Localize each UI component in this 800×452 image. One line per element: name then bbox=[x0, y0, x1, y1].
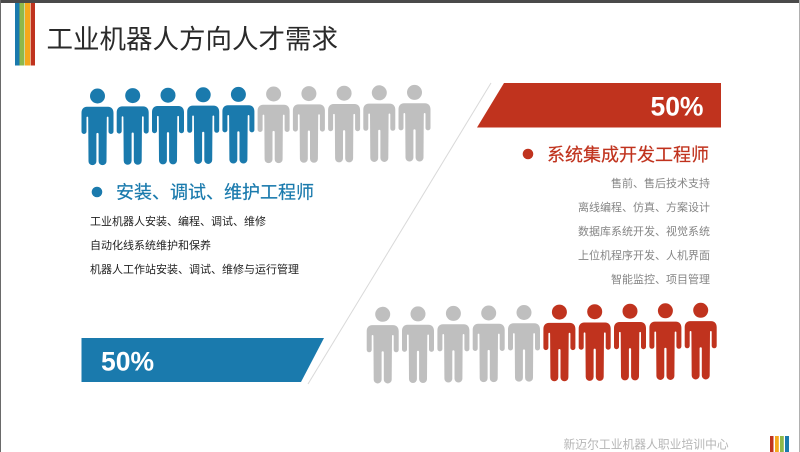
body text: installation duties bbox=[90, 214, 299, 276]
heading: installation engineer: 安装、调试、维护工程师 bbox=[116, 182, 314, 202]
body text: system integration duties: 数据库系统开发、视觉系统 bbox=[578, 224, 710, 238]
icon: title colour stripes bbox=[15, 3, 35, 66]
banner: red 50% bbox=[477, 83, 721, 128]
diagonal divider line bbox=[308, 83, 491, 384]
bullet: blue bbox=[92, 187, 102, 197]
body text: system integration duties: 售前、售后技术支持 bbox=[611, 176, 710, 190]
body text: installation duties: 机器人工作站安装、调试、维修与运行管理 bbox=[90, 262, 299, 276]
panel: system integration engineer text bbox=[523, 145, 710, 286]
title: 工业机器人方向人才需求 bbox=[46, 24, 338, 54]
footer: organisation name: 新迈尔工业机器人职业培训中心 bbox=[564, 438, 729, 452]
pictogram row: 50% blue, 50% grey bbox=[82, 85, 430, 165]
banner: blue 50% bbox=[82, 338, 324, 382]
pictogram row: 50% grey, 50% red bbox=[367, 303, 717, 383]
body text: system integration duties: 智能监控、项目管理 bbox=[611, 272, 710, 286]
icon: footer colour stripes bbox=[770, 436, 789, 452]
body text: installation duties: 自动化线系统维护和保养 bbox=[90, 238, 211, 252]
banner: blue 50%: 50% bbox=[101, 346, 154, 376]
panel: installation engineer text bbox=[90, 182, 314, 276]
banner: red 50%: 50% bbox=[650, 92, 704, 122]
body text: installation duties: 工业机器人安装、编程、调试、维修 bbox=[90, 214, 266, 228]
heading: system integration engineer: 系统集成开发工程师 bbox=[547, 145, 709, 165]
bullet: red bbox=[523, 149, 533, 159]
body text: system integration duties: 离线编程、仿真、方案设计 bbox=[578, 200, 710, 214]
body text: system integration duties: 上位机程序开发、人机界面 bbox=[578, 248, 710, 262]
body text: system integration duties bbox=[578, 176, 710, 286]
